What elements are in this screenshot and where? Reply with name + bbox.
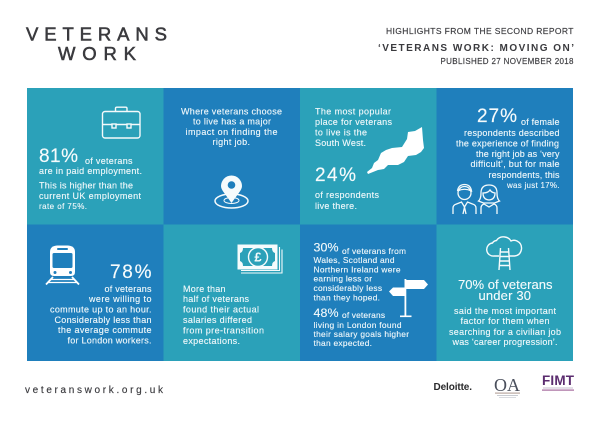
stat: 30%: 30% xyxy=(314,240,338,254)
panel: paid employment xyxy=(27,88,164,224)
text: career progression: was ‘career progression’. xyxy=(452,337,558,347)
text: veterans from Wales: of veterans from xyxy=(342,246,406,256)
text: commute: Considerably less than xyxy=(54,315,152,325)
text: more than half: More than xyxy=(183,284,226,294)
text: respondents described: the experience of finding xyxy=(456,138,559,148)
icon: location pin xyxy=(215,176,248,208)
logo: OA: OA xyxy=(494,375,520,395)
stat: 27%: 27% xyxy=(477,106,517,127)
text: commute xyxy=(50,284,152,346)
icon: signpost xyxy=(389,279,428,317)
icon: South West map xyxy=(367,127,424,174)
stat: 24%: 24% xyxy=(315,165,356,186)
text: where veterans choose: right job. xyxy=(212,137,250,147)
text: most popular place: place for veterans xyxy=(315,117,392,127)
text: where veterans choose: to live has a major xyxy=(193,116,271,126)
text: employment xyxy=(39,156,142,211)
text: veterans from Wales: than they hoped. xyxy=(314,292,380,302)
heading: 70% of veterans under 30: under 30 xyxy=(478,288,531,303)
text: more than half: from pre-transition xyxy=(183,326,264,336)
text: career progression: searching for a civilian job xyxy=(449,327,561,337)
text: veterans in London: of veterans xyxy=(342,310,385,320)
text: veterans from Wales: Northern Ireland were xyxy=(314,264,401,274)
logo: Veterans Work xyxy=(26,24,167,64)
text: where veterans choose: Where veterans choose xyxy=(181,106,282,116)
text: most popular place: South West. xyxy=(315,138,366,148)
panel: where veterans live xyxy=(164,88,300,224)
text: veterans in London: living in London found xyxy=(314,320,402,330)
text: career progression: factor for them when xyxy=(460,316,550,326)
text: veterans from Wales xyxy=(314,246,406,302)
icon: man and woman xyxy=(453,184,500,214)
text: more than half: half of veterans xyxy=(183,294,250,304)
text: career progression: said the most important xyxy=(454,306,556,316)
text: veterans from Wales: considerably less xyxy=(314,283,382,293)
text: of respondents: live there. xyxy=(315,201,357,211)
heading: 70% of veterans under 30: 70% of veterans xyxy=(458,277,553,292)
report header: PUBLISHED 27 NOVEMBER 2018 xyxy=(440,57,574,66)
text: respondents described: difficult’, but for male xyxy=(470,159,560,169)
text: employment: This is higher than the xyxy=(39,180,133,190)
text: employment: are in paid employment. xyxy=(39,166,142,176)
logo: Veterans Work: WORK xyxy=(58,43,137,64)
text: employment: of veterans xyxy=(85,156,133,166)
icon: cloud and ladder xyxy=(487,237,522,270)
text: respondents described xyxy=(456,117,560,190)
text: where veterans choose: impact on finding the xyxy=(186,127,278,137)
panel: career progression xyxy=(436,224,573,361)
heading: 70% of veterans under 30 xyxy=(458,277,553,303)
panel: commuting xyxy=(27,224,164,361)
stat: 81%: 81% xyxy=(39,146,78,167)
text: respondents described: respondents described xyxy=(464,128,560,138)
website: veteranswork.org.uk xyxy=(25,385,164,396)
text: commute: for London workers. xyxy=(68,336,152,346)
text: most popular place xyxy=(315,106,392,148)
text: veterans from Wales: earning less or xyxy=(314,274,372,284)
icon: banknotes: £ xyxy=(254,250,262,264)
text: of respondents: of respondents xyxy=(315,190,380,200)
text: commute: commute up to an hour. xyxy=(50,304,152,314)
panel: female respondents xyxy=(436,88,573,224)
logo: Deloitte: Deloitte. xyxy=(434,382,472,393)
stat: 78%: 78% xyxy=(110,262,152,283)
stat: 48%: 48% xyxy=(314,306,338,320)
text: more than half: found their actual xyxy=(183,304,259,314)
icon: train xyxy=(46,246,79,284)
text: employment: rate of 75%. xyxy=(39,202,87,211)
text: more than half xyxy=(183,284,264,346)
logo: Veterans Work: VETERANS xyxy=(26,24,167,44)
text: veterans from Wales: Wales, Scotland and xyxy=(314,255,395,265)
text: commute: of veterans xyxy=(104,284,152,294)
text: where veterans choose xyxy=(181,106,282,147)
icon: briefcase xyxy=(102,107,140,138)
text: respondents described: of female xyxy=(521,117,560,127)
text: employment: current UK employment xyxy=(39,191,141,201)
text: veterans in London: their salary goals higher xyxy=(314,329,409,339)
text: career progression xyxy=(449,306,561,347)
text: respondents described: respondents, this xyxy=(488,170,560,180)
panel: salary goals xyxy=(300,224,436,361)
text: more than half: expectations. xyxy=(183,336,240,346)
logo: FIMT: FIMT xyxy=(542,373,575,388)
panel: salaries xyxy=(164,224,300,361)
text: veterans in London: than expected. xyxy=(314,338,372,348)
text: commute: were willing to xyxy=(88,294,152,304)
text: respondents described: was just 17%. xyxy=(506,181,560,190)
text: most popular place: to live is the xyxy=(315,128,367,138)
report header: ‘VETERANS WORK: MOVING ON’ xyxy=(378,43,574,54)
text: respondents described: the right job as ‘very xyxy=(476,149,560,159)
text: veterans in London xyxy=(314,310,409,348)
text: commute: the average commute xyxy=(58,325,152,335)
text: more than half: salaries differed xyxy=(183,315,252,325)
report header xyxy=(378,26,574,66)
text: of respondents xyxy=(315,190,380,211)
text: most popular place: The most popular xyxy=(315,106,391,116)
panel: South West xyxy=(300,88,436,224)
report header: HIGHLIGHTS FROM THE SECOND REPORT xyxy=(386,26,574,36)
